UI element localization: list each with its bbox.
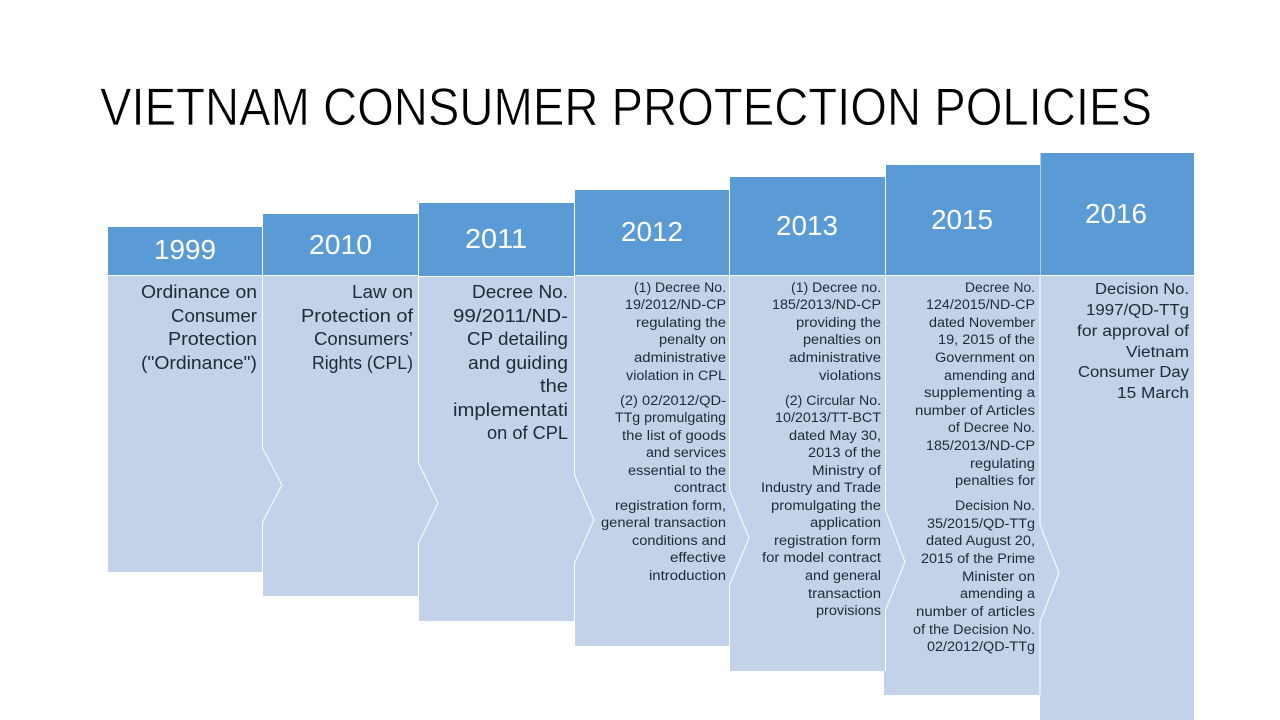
text: decree 185 and circular 10: 2013 of the — [808, 445, 881, 460]
text: decree 185 and circular 10: (1) Decree no. — [791, 280, 881, 295]
text: ordinance — [141, 282, 257, 373]
text: decree 185 and circular 10: application — [810, 515, 881, 530]
body block: 2016 — [1040, 276, 1194, 720]
text: decision 1997: Vietnam — [1126, 344, 1189, 361]
text: decree 99: the — [540, 376, 568, 396]
text: decree 99: 99/2011/ND- — [453, 306, 568, 326]
text: decree 19 and 02: regulating the — [636, 315, 726, 330]
text: decree 124 and decision 35: 19, 2015 of the — [938, 332, 1035, 347]
text: decree 19 and 02: penalty on — [659, 332, 726, 347]
body block: 2013 — [730, 276, 885, 671]
body block: 1999 — [108, 276, 263, 572]
text: decree 124 and decision 35: of Decree No. — [948, 420, 1035, 435]
text: decree 124 and decision 35: 02/2012/QD-TTg — [927, 639, 1035, 654]
body block: 2015 — [884, 276, 1040, 695]
header block: 2013 — [730, 177, 885, 275]
text: decree 124 and decision 35: supplementing a — [924, 385, 1036, 400]
year: 2011: 2011 — [465, 223, 527, 254]
text: decree 124 and decision 35: amending and — [944, 368, 1035, 383]
text: ordinance: Ordinance on — [141, 282, 257, 302]
text: decree 185 and circular 10: providing the — [796, 315, 881, 330]
text: decree 19 and 02: TTg promulgating — [615, 410, 726, 425]
body block: 2012 — [575, 276, 730, 646]
year: 2010: 2010 — [309, 229, 372, 260]
text: ordinance: Consumer — [171, 306, 257, 326]
text: decree 19 and 02: the list of goods — [622, 428, 726, 443]
text: decree 19 and 02: essential to the — [628, 463, 726, 478]
header block: 2010 — [263, 214, 418, 275]
text: decree 124 and decision 35: amending a — [960, 586, 1036, 601]
text: decree 185 and circular 10: Ministry of — [812, 463, 881, 478]
panel: 2010 — [262, 214, 419, 596]
text: law: Consumers’ — [314, 329, 413, 349]
panel: 1999 — [108, 227, 263, 572]
header block: 2012 — [575, 190, 729, 275]
text: decree 124 and decision 35: Decision No. — [955, 498, 1035, 513]
text: law: Rights (CPL) — [312, 353, 413, 373]
text: decree 19 and 02: effective — [670, 550, 726, 565]
text: decree 124 and decision 35: 2015 of the Prime — [921, 551, 1035, 566]
header block: 2011 — [419, 203, 574, 276]
text: decree 19 and 02: registration form, — [615, 498, 726, 513]
text: decree 99: on of CPL — [487, 423, 568, 443]
text: decree 19 and 02: contract — [674, 480, 726, 495]
text: decree 185 and circular 10: provisions — [816, 603, 881, 618]
text: decree 185 and circular 10: (2) Circular No. — [785, 393, 881, 408]
text: decree 124 and decision 35: number of articles — [916, 604, 1035, 619]
header block: 1999 — [108, 227, 262, 275]
text: decree 19 and 02: conditions and — [632, 533, 726, 548]
text: decree 185 and circular 10: 10/2013/TT-BCT — [775, 410, 881, 425]
text: decision 1997: 15 March — [1117, 385, 1189, 402]
text: law — [301, 282, 414, 373]
panel: 2015 — [884, 165, 1040, 695]
text: decree 19 and 02: introduction — [649, 568, 726, 583]
text: decree 99 — [453, 282, 568, 443]
text: decision 1997: 1997/QD-TTg — [1086, 302, 1189, 319]
text: decree 185 and circular 10: 185/2013/ND-CP — [772, 297, 881, 312]
text: decree 185 and circular 10 — [761, 280, 881, 618]
text: decree 185 and circular 10: promulgating the — [771, 498, 881, 513]
text: decree 124 and decision 35: dated November — [929, 315, 1036, 330]
text: decree 124 and decision 35: 35/2015/QD-TTg — [927, 516, 1035, 531]
text: decree 124 and decision 35: regulating — [970, 456, 1035, 471]
panel: 2012 — [574, 190, 730, 646]
text: decree 19 and 02 — [601, 280, 727, 583]
arrow: chevron 2012 to 2013 — [730, 276, 749, 646]
text: decree 19 and 02: (2) 02/2012/QD- — [620, 393, 726, 408]
text: decree 124 and decision 35 — [913, 280, 1036, 654]
arrow: chevron 1999 to 2010 — [262, 276, 282, 572]
text: decree 185 and circular 10: Industry and Trade — [761, 480, 881, 495]
arrow: chevron 2011 to 2012 — [574, 277, 594, 621]
header block: 2016 — [1040, 153, 1194, 275]
year: 2013: 2013 — [776, 210, 838, 241]
text: decree 19 and 02: and services — [646, 445, 726, 460]
arrow: chevron 2015 to 2016 — [1040, 276, 1059, 695]
text: decision 1997: Consumer Day — [1078, 364, 1189, 381]
panel: 2013 — [730, 177, 885, 671]
text: decree 124 and decision 35: Decree No. — [965, 280, 1035, 295]
body block: 2011 — [419, 277, 575, 621]
text: decree 124 and decision 35: penalties for — [955, 473, 1036, 488]
text: decree 19 and 02: administrative — [634, 350, 726, 365]
text: decree 19 and 02: violation in CPL — [626, 368, 727, 383]
year: 2015: 2015 — [931, 204, 993, 235]
text: decree 99: Decree No. — [472, 282, 568, 302]
title: VIETNAM CONSUMER PROTECTION POLICIES — [100, 78, 1152, 137]
text: decision 1997 — [1077, 281, 1190, 402]
text: decree 124 and decision 35: of the Decision No. — [913, 622, 1035, 637]
text: decree 185 and circular 10: administrative — [789, 350, 881, 365]
text: decree 185 and circular 10: registration form — [774, 533, 881, 548]
text: ordinance: ("Ordinance") — [141, 353, 257, 373]
text: decree 124 and decision 35: Minister on — [962, 569, 1035, 584]
text: decree 185 and circular 10: violations — [819, 368, 881, 383]
text: decree 19 and 02: 19/2012/ND-CP — [625, 297, 726, 312]
text: decree 185 and circular 10: transaction — [808, 586, 881, 601]
text: decree 124 and decision 35: dated August 20, — [926, 533, 1035, 548]
text: decree 99: and guiding — [468, 353, 568, 373]
text: law: Law on — [352, 282, 413, 302]
text: decree 124 and decision 35: 124/2015/ND-CP — [926, 297, 1035, 312]
header block: 2015 — [886, 165, 1040, 275]
panel: 2016 — [1040, 153, 1194, 720]
year: 1999: 1999 — [154, 234, 216, 265]
year: 2012: 2012 — [621, 216, 683, 247]
body block: 2010 — [263, 276, 419, 596]
text: decree 99: CP detailing — [467, 329, 568, 349]
text: decree 19 and 02: (1) Decree No. — [634, 280, 726, 295]
text: decree 19 and 02: general transaction — [601, 515, 726, 530]
panel: 2011 — [418, 203, 575, 621]
text: decree 99: implementati — [453, 400, 568, 420]
arrow: chevron 2010 to 2011 — [418, 276, 438, 596]
text: decision 1997: Decision No. — [1095, 281, 1189, 298]
text: ordinance: Protection — [168, 329, 257, 349]
text: decree 124 and decision 35: Government on — [935, 350, 1035, 365]
text: decree 185 and circular 10: penalties on — [803, 332, 881, 347]
text: decree 185 and circular 10: for model contract — [762, 550, 881, 565]
text: decision 1997: for approval of — [1077, 323, 1190, 340]
text: decree 185 and circular 10: dated May 30, — [789, 428, 881, 443]
text: decree 185 and circular 10: and general — [805, 568, 881, 583]
arrow: chevron 2013 to 2015 — [886, 276, 905, 671]
text: decree 124 and decision 35: 185/2013/ND-CP — [926, 438, 1035, 453]
text: decree 124 and decision 35: number of Articles — [915, 403, 1035, 418]
year: 2016: 2016 — [1085, 198, 1147, 229]
text: law: Protection of — [301, 306, 414, 326]
